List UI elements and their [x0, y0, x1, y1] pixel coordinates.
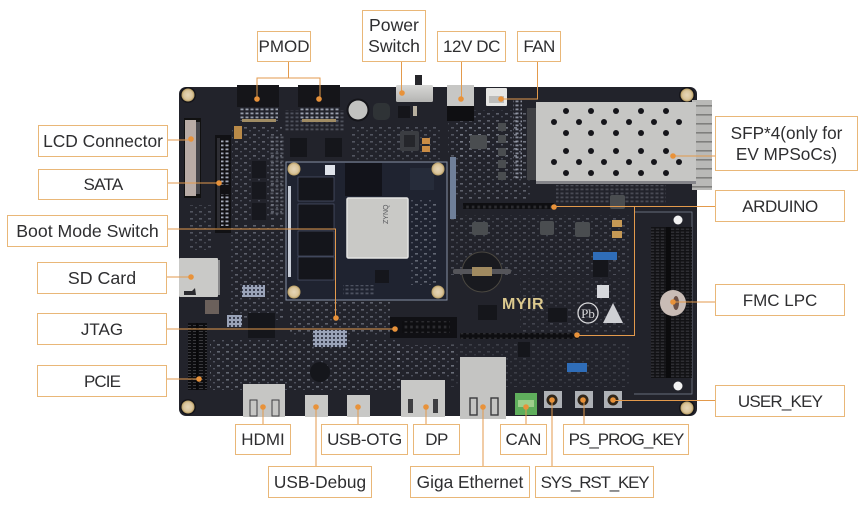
label: FAN	[517, 31, 561, 62]
CAN terminal	[515, 393, 537, 415]
leader: DP	[423, 404, 429, 424]
coin battery holder	[453, 252, 511, 292]
LCD connector	[184, 118, 201, 198]
label: SYS_RST_KEY: SYS_RST_KEY	[541, 472, 648, 492]
leader: Giga Ethernet	[480, 404, 486, 466]
SD card slot	[179, 258, 220, 297]
label: PCIE	[37, 365, 167, 397]
label: PS_PROG_KEY	[563, 424, 689, 455]
leader: SYS_RST_KEY	[549, 397, 555, 466]
label: Giga Ethernet: Giga Ethernet	[417, 472, 523, 492]
PMOD headers	[237, 85, 340, 122]
label: HDMI: HDMI	[241, 430, 285, 449]
JTAG header	[390, 317, 457, 338]
label: USB-OTG	[321, 424, 408, 455]
USB-C connectors	[305, 395, 370, 417]
leader: PS_PROG_KEY	[580, 397, 586, 424]
leader: FAN	[498, 61, 538, 102]
label: SATA	[38, 169, 168, 200]
board substrate	[179, 87, 697, 416]
label: ARDUINO: ARDUINO	[742, 196, 818, 216]
label: Power Switch: Power	[369, 15, 419, 35]
SFP cage	[513, 100, 712, 190]
HDMI connector	[243, 384, 285, 417]
label: LCD Connector: LCD Connector	[43, 130, 163, 150]
label: FMC LPC: FMC LPC	[743, 290, 817, 310]
label: JTAG: JTAG	[81, 320, 123, 338]
label: Power Switch: Switch	[368, 36, 420, 56]
label: SFP*4: EV MPSoCs)	[736, 144, 837, 164]
FMC LPC connector	[634, 212, 692, 394]
leader: SD Card	[166, 274, 194, 280]
label: CAN	[500, 424, 547, 455]
label: USB-Debug	[268, 466, 372, 498]
label: HDMI	[235, 424, 291, 455]
leader: Power Switch	[399, 61, 405, 96]
label: SD Card	[37, 262, 167, 294]
label: 12V DC	[437, 31, 506, 62]
label: USB-OTG: USB-OTG	[327, 430, 402, 449]
label: LCD Connector	[38, 125, 168, 157]
label: JTAG	[37, 313, 167, 345]
leader: PMOD	[254, 61, 322, 102]
leader: HDMI	[260, 404, 266, 424]
label: SYS_RST_KEY	[535, 466, 654, 498]
label: PS_PROG_KEY: PS_PROG_KEY	[569, 430, 683, 449]
DP connector	[401, 380, 445, 417]
label: USER_KEY: USER_KEY	[738, 392, 822, 410]
PCIE slot	[188, 323, 207, 390]
leader: USB-OTG	[355, 404, 361, 424]
leader: PCIE	[166, 376, 202, 382]
label: Boot Mode Switch: Boot Mode Switch	[16, 220, 159, 240]
label: USB-Debug: USB-Debug	[274, 472, 366, 492]
label: Boot Mode Switch	[7, 215, 168, 247]
12V DC jack	[447, 85, 474, 121]
leader lines and dots	[166, 61, 715, 466]
label: PMOD	[257, 31, 311, 62]
leader: FMC LPC	[670, 299, 715, 305]
label: DP	[413, 424, 460, 455]
leader: USB-Debug	[313, 404, 319, 466]
label: SFP*4	[715, 116, 858, 171]
label: Power Switch	[362, 10, 426, 62]
leader: SATA	[167, 180, 222, 186]
label: SFP*4: SFP*4(only for	[731, 122, 842, 142]
label: FMC LPC	[715, 284, 845, 316]
leader: LCD Connector	[167, 136, 194, 142]
Ethernet jack	[460, 357, 506, 419]
fan connector	[486, 88, 507, 106]
compliance symbols	[578, 303, 623, 323]
label: FAN: FAN	[523, 37, 555, 56]
label: PMOD: PMOD	[258, 37, 310, 56]
leader: JTAG	[166, 326, 398, 332]
label: DP: DP	[425, 430, 448, 449]
leader: Boot Mode Switch	[167, 229, 339, 321]
misc board components	[205, 123, 625, 382]
tactile keys	[544, 391, 622, 408]
label: SATA: SATA	[83, 175, 123, 194]
label: PCIE: PCIE	[84, 372, 120, 390]
leader: CAN	[523, 404, 529, 424]
leader: 12V DC	[458, 61, 464, 102]
leader: USER_KEY	[610, 397, 715, 403]
inductor and orange capacitors	[234, 126, 430, 220]
label: USER_KEY	[715, 385, 845, 417]
power switch	[396, 75, 433, 102]
compliance symbols: Pb	[581, 306, 595, 321]
MYIR logo: MYIR	[502, 296, 544, 313]
Arduino headers	[460, 203, 580, 339]
leader: SFP	[670, 153, 715, 159]
electrolytic capacitor and buzzer	[346, 98, 417, 122]
label: ARDUINO	[715, 190, 845, 222]
SATA connector	[215, 135, 231, 233]
mounting holes	[180, 87, 695, 416]
label: 12V DC: 12V DC	[443, 37, 500, 56]
label: SD Card: SD Card	[68, 268, 136, 288]
core module: ZYNQ	[383, 204, 390, 224]
label: Giga Ethernet	[410, 466, 530, 498]
core module	[286, 157, 456, 300]
leader: ARDUINO	[551, 204, 715, 338]
label: CAN: CAN	[506, 430, 541, 449]
